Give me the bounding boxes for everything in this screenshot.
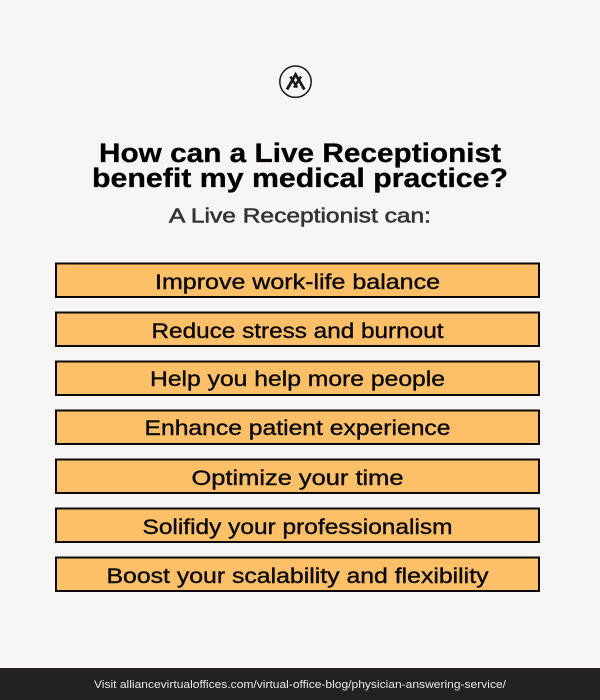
- subtitle: A Live Receptionist can:: [169, 204, 431, 228]
- item: help more people: [56, 362, 539, 395]
- item: optimize time: Optimize your time: [192, 466, 404, 490]
- item: patient experience: Enhance patient experience: [144, 416, 450, 440]
- item: scalability and flexibility: Boost your scalability and flexibility: [106, 564, 489, 588]
- list of benefits: [56, 264, 539, 591]
- item: scalability and flexibility: [56, 558, 539, 591]
- title: [92, 138, 508, 193]
- item: professionalism: Solifidy your professionalism: [142, 515, 452, 539]
- item: patient experience: [56, 410, 539, 444]
- footer bar: Visit alliancevirtualoffices.com/virtual-office-blog/physician-answering-service/: [94, 679, 507, 691]
- item: professionalism: [56, 508, 539, 542]
- item: work-life balance: Improve work-life balance: [155, 270, 440, 294]
- footer bar: [0, 668, 600, 700]
- title: benefit my medical practice?: [92, 163, 508, 193]
- item: help more people: Help you help more people: [150, 367, 445, 391]
- item: stress and burnout: [56, 312, 539, 346]
- item: stress and burnout: Reduce stress and burnout: [152, 319, 444, 343]
- item: work-life balance: [56, 264, 539, 297]
- item: optimize time: [56, 460, 539, 493]
- icon: logo: [280, 66, 311, 97]
- title: How can a Live Receptionist: [99, 138, 501, 168]
